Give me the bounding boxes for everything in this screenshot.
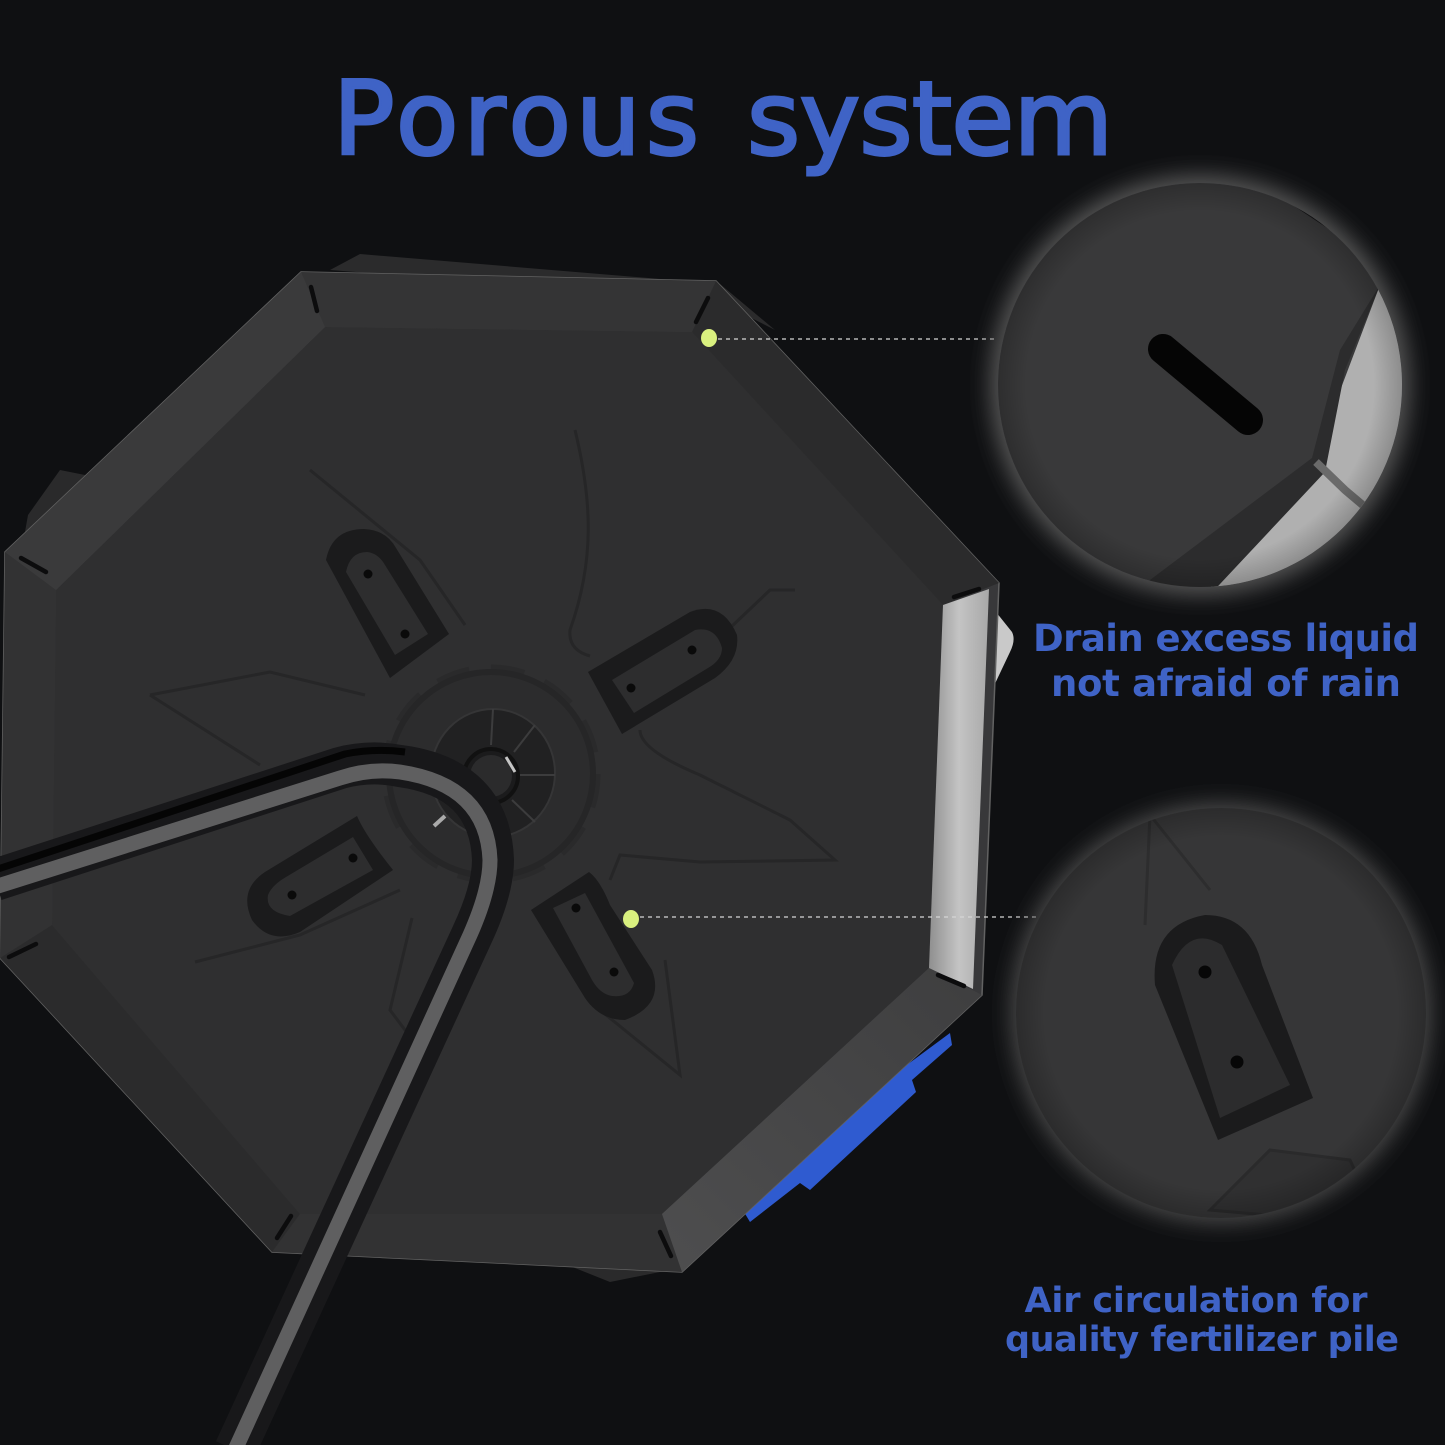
text: air circulation: quality fertilizer pile <box>1005 1320 1399 1360</box>
rim drainage slots <box>9 287 979 1256</box>
composter bottom view <box>0 254 1014 1445</box>
leader line: slot to detail <box>701 329 998 347</box>
text: drain excess liquid: not afraid of rain <box>1051 662 1401 705</box>
text: drain excess liquid: Drain excess liquid <box>1033 617 1419 660</box>
text: air circulation <box>1005 1281 1399 1360</box>
marker dot <box>701 329 717 347</box>
foot pads with holes <box>247 529 737 1020</box>
detail circle: air vents <box>1010 800 1435 1225</box>
tubular stand frame <box>0 750 493 1445</box>
slot opening <box>1163 349 1248 420</box>
central hub <box>384 667 598 881</box>
octagon outer rim <box>0 272 999 1272</box>
title: Porous <box>333 60 699 179</box>
steel side panel <box>929 589 989 989</box>
title: system <box>747 60 1113 179</box>
detail circle: drainage slot <box>990 170 1420 600</box>
top and side rim facets <box>301 272 716 332</box>
floor panel <box>52 327 943 1214</box>
star-shaped floor ribs <box>150 430 835 1075</box>
blue handle <box>744 1033 952 1222</box>
text: air circulation: Air circulation for <box>1024 1281 1368 1321</box>
text: drain excess liquid <box>1033 617 1419 705</box>
marker dot <box>623 910 639 928</box>
rear body corners <box>20 254 1014 1282</box>
leader line: foot pad to detail <box>623 910 1036 928</box>
